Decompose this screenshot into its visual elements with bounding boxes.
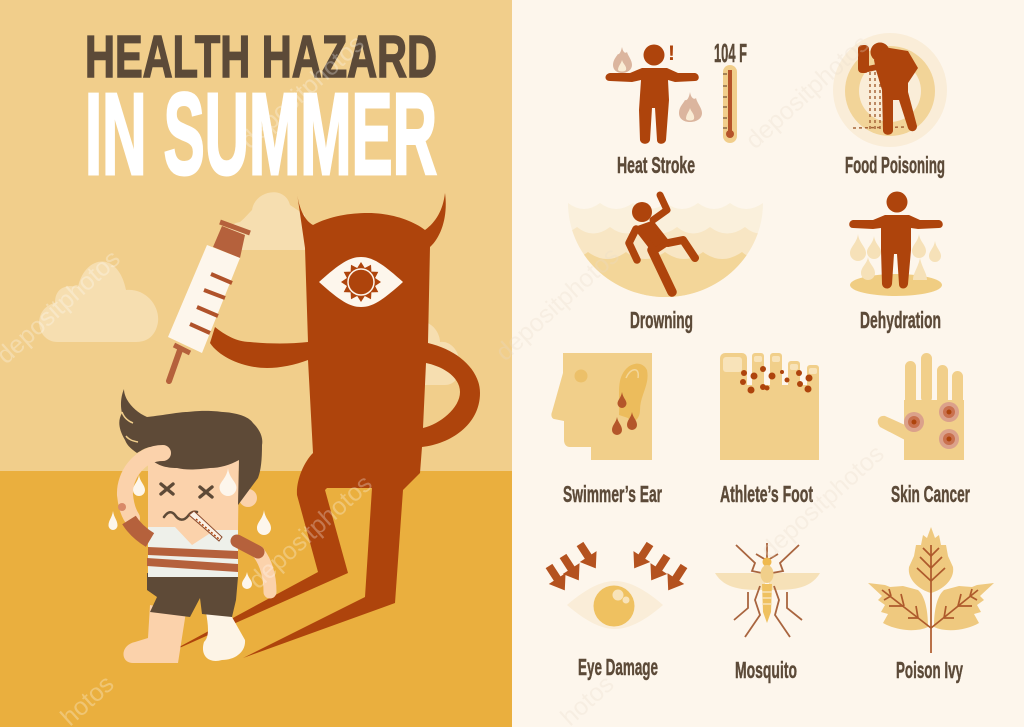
stock watermarks: depositphotos [755, 439, 890, 564]
face [148, 455, 239, 545]
bandaged foot [203, 610, 245, 661]
title line: Health Hazard: HEALTH HAZARD [85, 24, 437, 90]
puddle [850, 274, 942, 296]
hand [878, 353, 964, 460]
lowered arm sleeve [237, 541, 258, 552]
label: Athlete’s Foot [720, 481, 813, 507]
panel: left illustration background [0, 0, 512, 727]
drops [850, 234, 941, 280]
stock watermarks: depositphotos [235, 29, 370, 154]
hair [119, 389, 262, 505]
scrape [118, 503, 126, 511]
iris [594, 586, 634, 626]
label: Swimmer’s Ear [563, 481, 662, 507]
label: Dehydration [860, 307, 941, 333]
devil body with arms and shadow legs [168, 193, 480, 658]
lowered arm [258, 552, 270, 592]
fungus spots [740, 366, 812, 394]
raised arm sleeve [129, 520, 150, 540]
text: 104 F [714, 38, 747, 68]
icon: food poisoning [833, 33, 947, 147]
person [849, 192, 943, 288]
hair highlights [122, 412, 138, 442]
arrows [541, 539, 692, 596]
veins [882, 545, 978, 653]
icon: drowning [568, 192, 763, 297]
flames [613, 47, 702, 122]
label: Heat Stroke [617, 152, 695, 178]
legs and foot [123, 605, 186, 663]
icon: mosquito [715, 543, 820, 637]
clouds [39, 192, 459, 385]
eye with sun [319, 257, 403, 307]
toenails [723, 356, 817, 374]
body [760, 558, 774, 623]
highlights [612, 590, 630, 604]
exclamation mark: ! [668, 42, 675, 65]
label: Eye Damage [578, 654, 658, 680]
title line: In Summer: IN SUMMER [85, 69, 437, 199]
ear [619, 364, 648, 421]
eye white [567, 581, 663, 629]
panel: right background [512, 0, 1024, 727]
shorts [147, 573, 238, 617]
icon: swimmer's ear [551, 353, 652, 460]
head profile [551, 353, 652, 460]
devil character [168, 193, 480, 658]
icon: skin cancer [878, 353, 964, 460]
raised arm [125, 453, 163, 518]
blood drops [612, 392, 637, 435]
thermometer [723, 65, 737, 143]
title [85, 24, 437, 199]
vomit [853, 72, 905, 131]
icon: heat stroke [606, 38, 747, 144]
foot [720, 353, 819, 460]
thermometer [189, 511, 222, 541]
legs and antennae [734, 543, 802, 637]
person [629, 195, 695, 292]
shirt [148, 527, 238, 577]
icon: eye damage [541, 539, 692, 629]
ear [239, 489, 257, 507]
icon: poison ivy [868, 527, 994, 653]
stock watermarks: depositphotos [490, 241, 625, 366]
shirt stripes [147, 547, 238, 572]
icon: dehydration [849, 192, 943, 296]
label: Skin Cancer [891, 481, 970, 507]
icon: athlete's foot [720, 353, 819, 460]
label: Poison Ivy [896, 657, 963, 683]
stock watermarks: depositphotos [243, 469, 378, 594]
label: Mosquito [735, 657, 797, 683]
boy character [108, 389, 271, 663]
sweat drops [108, 468, 271, 589]
person bent over [858, 42, 918, 135]
label: Drowning [630, 307, 693, 333]
x eyes [161, 484, 212, 497]
wings [715, 573, 820, 590]
lesions [904, 402, 959, 449]
stock watermarks: depositphotos [740, 29, 875, 154]
eye [574, 370, 588, 382]
person [606, 44, 699, 144]
water layers [568, 203, 763, 297]
label: Food Poisoning [845, 152, 945, 178]
rings [833, 33, 947, 147]
syringe [168, 222, 250, 381]
leaves [868, 527, 994, 630]
wavy mouth [164, 512, 197, 520]
